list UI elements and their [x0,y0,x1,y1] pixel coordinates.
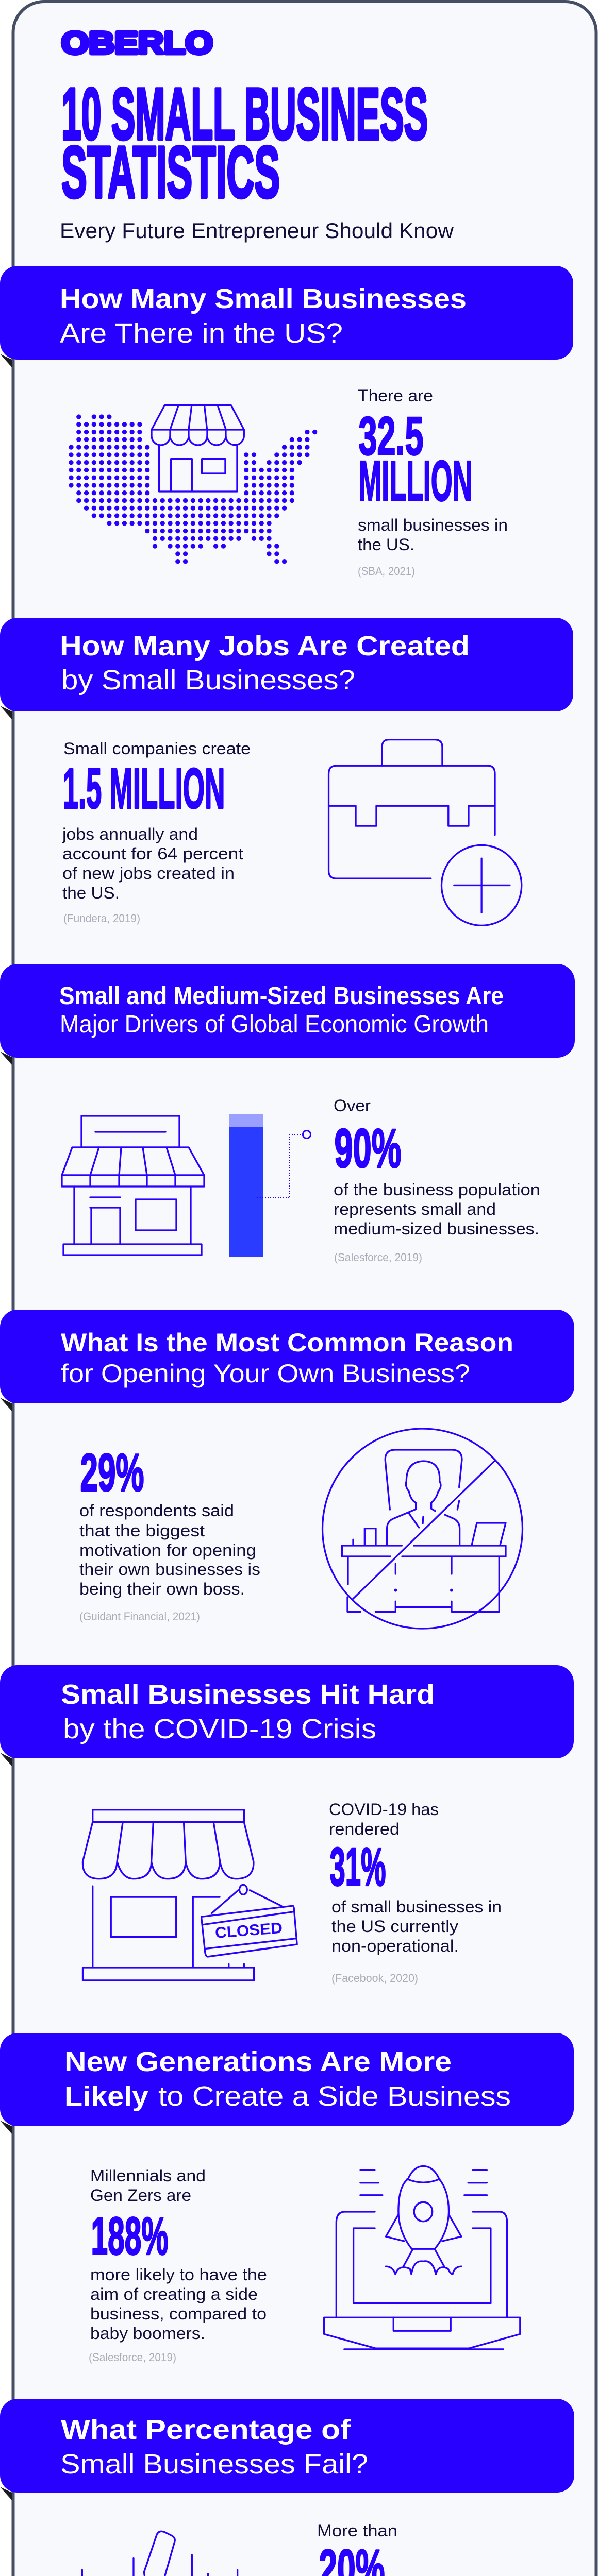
section 5 heading [0,1665,574,1766]
stat: 32.5 million: small businesses in [358,516,508,534]
stat: 29 percent: that the biggest [79,1521,205,1540]
stat: 188 percent: business, compared to [90,2304,267,2323]
stat: 31 percent: COVID-19 has [329,1800,439,1819]
stat: 1.5 million: of new jobs created in [62,864,235,883]
stat: 90 percent: of the business population [334,1180,540,1199]
stat: 32.5 million: MILLION [359,449,472,513]
stat: 29 percent: their own businesses is [79,1560,260,1579]
stat: 1.5 million: 1.5 MILLION [63,757,225,820]
stat: 29 percent: 29% [80,1443,144,1502]
section 5 heading: Small Businesses Hit Hard [61,1679,435,1710]
section 6 heading [0,2033,574,2134]
stat: 29 percent: (Guidant Financial, 2021) [79,1610,200,1623]
section 3 heading [0,964,575,1065]
store [152,405,244,492]
stat: 31 percent: (Facebook, 2020) [331,1972,418,1985]
section 3 heading: Major Drivers of Global Economic Growth [60,1011,489,1038]
section 5 heading: by the COVID-19 Crisis [63,1714,376,1744]
stat: 90 percent: (Salesforce, 2019) [334,1251,422,1264]
icon: dotted US map with store [71,405,315,562]
section 2 heading [0,618,573,719]
stat: 188 percent: aim of creating a side [90,2285,258,2303]
icon: briefcase with plus [329,740,522,925]
stat: 90 percent: 90% [334,1117,401,1179]
section 7 heading: Small Businesses Fail? [60,2449,368,2480]
stat: 1.5 million: the US. [62,884,120,902]
stat: 90 percent: Over [334,1096,371,1115]
section 4 heading [0,1310,574,1411]
section 1 heading [0,266,573,367]
stat: 1.5 million: jobs annually and [62,825,198,843]
section 6 heading: Likely [64,2081,148,2112]
section 6 heading: New Generations Are More [64,2046,452,2077]
stat: 188 percent: baby boomers. [90,2324,205,2343]
stat: 90 percent: medium-sized businesses. [334,1219,539,1238]
section 7 heading: What Percentage of [61,2414,351,2445]
stat: 31 percent: 31% [330,1837,386,1897]
stat: 31 percent [329,1800,502,1985]
stat: 188 percent: 188% [91,2206,168,2266]
stat: 32.5 million: There are [358,386,433,405]
title [61,73,428,213]
stat: 31 percent: rendered [329,1820,400,1838]
stat: 29 percent [79,1443,260,1623]
stat: 90 percent [334,1096,540,1264]
subtitle: Every Future Entrepreneur Should Know [60,218,454,243]
icon: crossed-out boss at desk [323,1429,523,1629]
stat: 188 percent: (Salesforce, 2019) [89,2351,176,2364]
section 7 heading [0,2399,574,2500]
stat: 32.5 million [358,386,508,578]
stat: 31 percent: the US currently [331,1917,458,1936]
chart: 90 percent bar [229,1114,310,1257]
stat: 32.5 million: 32.5 [359,406,424,467]
stat: 32.5 million: (SBA, 2021) [358,565,415,578]
stat: 1.5 million: account for 64 percent [62,844,243,863]
stat: 1.5 million: (Fundera, 2019) [63,912,140,925]
section 2 heading: by Small Businesses? [61,665,355,696]
title: STATISTICS [61,131,280,213]
stat: 31 percent: of small businesses in [331,1897,502,1916]
stat: 31 percent: non-operational. [331,1937,459,1955]
stat: 188 percent: more likely to have the [90,2265,267,2284]
section 4 heading: What Is the Most Common Reason [61,1328,513,1357]
stat: 1.5 million: Small companies create [63,739,251,758]
section 2 heading: How Many Jobs Are Created [60,631,470,662]
section 1 heading: Are There in the US? [60,318,343,349]
dot map [71,417,315,562]
stat: 29 percent: being their own boss. [79,1580,245,1598]
stat: 188 percent [89,2166,267,2364]
stat: 188 percent: Millennials and [90,2166,206,2185]
stat: 1.5 million [62,739,251,925]
sign text: closed: CLOSED [214,1920,283,1942]
section 4 heading: for Opening Your Own Business? [61,1359,470,1388]
stat: 20 percent [317,2521,517,2576]
icon: closed store [82,1810,297,1980]
icon: rocket launching from laptop [324,2166,520,2349]
stat: 20 percent: More than [317,2521,397,2540]
stat: 29 percent: of respondents said [79,1501,234,1520]
section 1 heading: How Many Small Businesses [60,283,467,314]
stat: 188 percent: Gen Zers are [90,2186,191,2205]
section 6 heading: to Create a Side Business [158,2081,511,2112]
stat: 29 percent: motivation for opening [79,1541,256,1560]
stat: 90 percent: represents small and [334,1200,496,1218]
icon: storefront [62,1116,204,1255]
icon: falling person [67,2531,275,2576]
stat: 32.5 million: the US. [358,535,414,554]
logo: OBERLO [61,26,213,60]
section 3 heading: Small and Medium-Sized Businesses Are [59,982,504,1010]
